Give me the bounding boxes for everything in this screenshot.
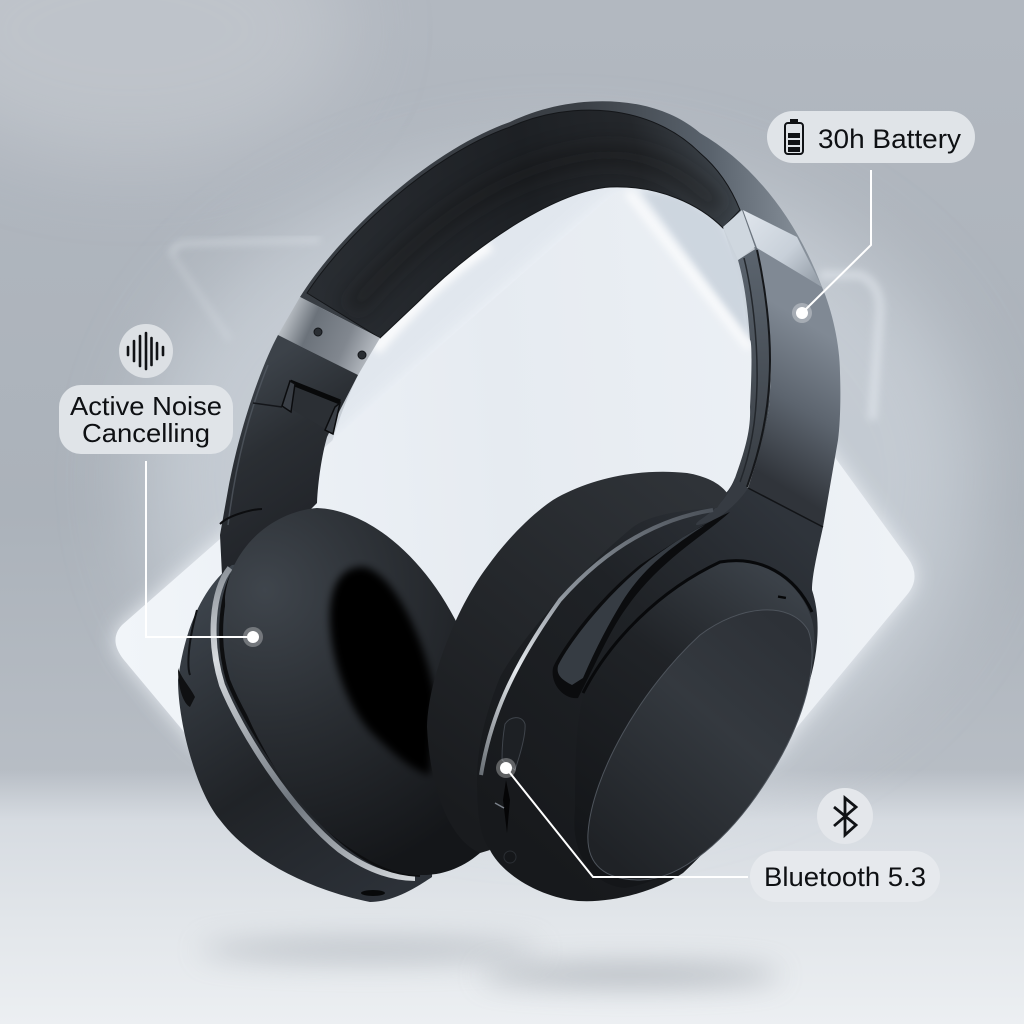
glowing diamond panel <box>115 189 915 800</box>
hinge bracket <box>282 381 340 434</box>
left arm <box>220 335 358 575</box>
arm outer edge line <box>228 365 268 525</box>
indicator slit <box>778 595 786 599</box>
label pill <box>750 851 940 902</box>
arch interior glow <box>320 186 750 560</box>
marker dot <box>496 758 516 778</box>
icon: battery <box>785 119 803 154</box>
right pad <box>427 472 727 853</box>
right arm <box>748 248 840 527</box>
right silver band <box>723 210 822 287</box>
left groove <box>188 610 197 675</box>
left slider silver <box>278 297 380 375</box>
rim dark arc <box>583 561 812 693</box>
left side button <box>178 668 195 707</box>
right plate <box>588 610 812 880</box>
yoke collar <box>696 478 748 525</box>
glow outline panel <box>172 240 880 420</box>
right ear cup shell <box>462 478 823 901</box>
left ear cup shell <box>178 560 440 902</box>
slot pill <box>553 512 730 698</box>
marker dot <box>792 303 812 323</box>
yoke seam <box>748 488 823 527</box>
callout: battery <box>767 111 975 323</box>
headband shading <box>350 155 720 310</box>
label pill: 30h Battery <box>818 124 962 154</box>
label pill <box>59 385 233 454</box>
callout: bluetooth <box>496 758 940 902</box>
label pill: Bluetooth 5.3 <box>764 862 926 892</box>
right arm groove <box>747 250 770 487</box>
slider screws <box>314 328 366 359</box>
marker dot <box>243 627 263 647</box>
label pill <box>767 111 975 163</box>
callout: active noise cancelling <box>59 324 263 647</box>
leader line <box>146 461 253 637</box>
floor shadows <box>200 938 780 986</box>
leader line <box>802 170 871 313</box>
left pad <box>225 508 480 875</box>
right plate rim <box>574 561 814 888</box>
headband outer strip <box>300 101 822 338</box>
label pill: Active Noise <box>70 391 222 421</box>
small button <box>504 851 516 863</box>
arm seam <box>253 403 282 407</box>
headband main <box>307 110 740 338</box>
leader line <box>506 768 748 877</box>
label pill: Cancelling <box>82 418 210 448</box>
right arm inner strip <box>735 248 770 488</box>
usb port <box>361 890 385 896</box>
lower rocker <box>503 780 510 833</box>
left pad hole <box>330 567 435 775</box>
volume button <box>502 718 525 770</box>
headphones <box>178 101 840 902</box>
icon: waveform <box>119 324 173 378</box>
left silver ring <box>214 568 415 878</box>
right silver ring <box>481 510 713 775</box>
left arm crease <box>220 509 262 524</box>
icon: bluetooth <box>817 788 873 844</box>
